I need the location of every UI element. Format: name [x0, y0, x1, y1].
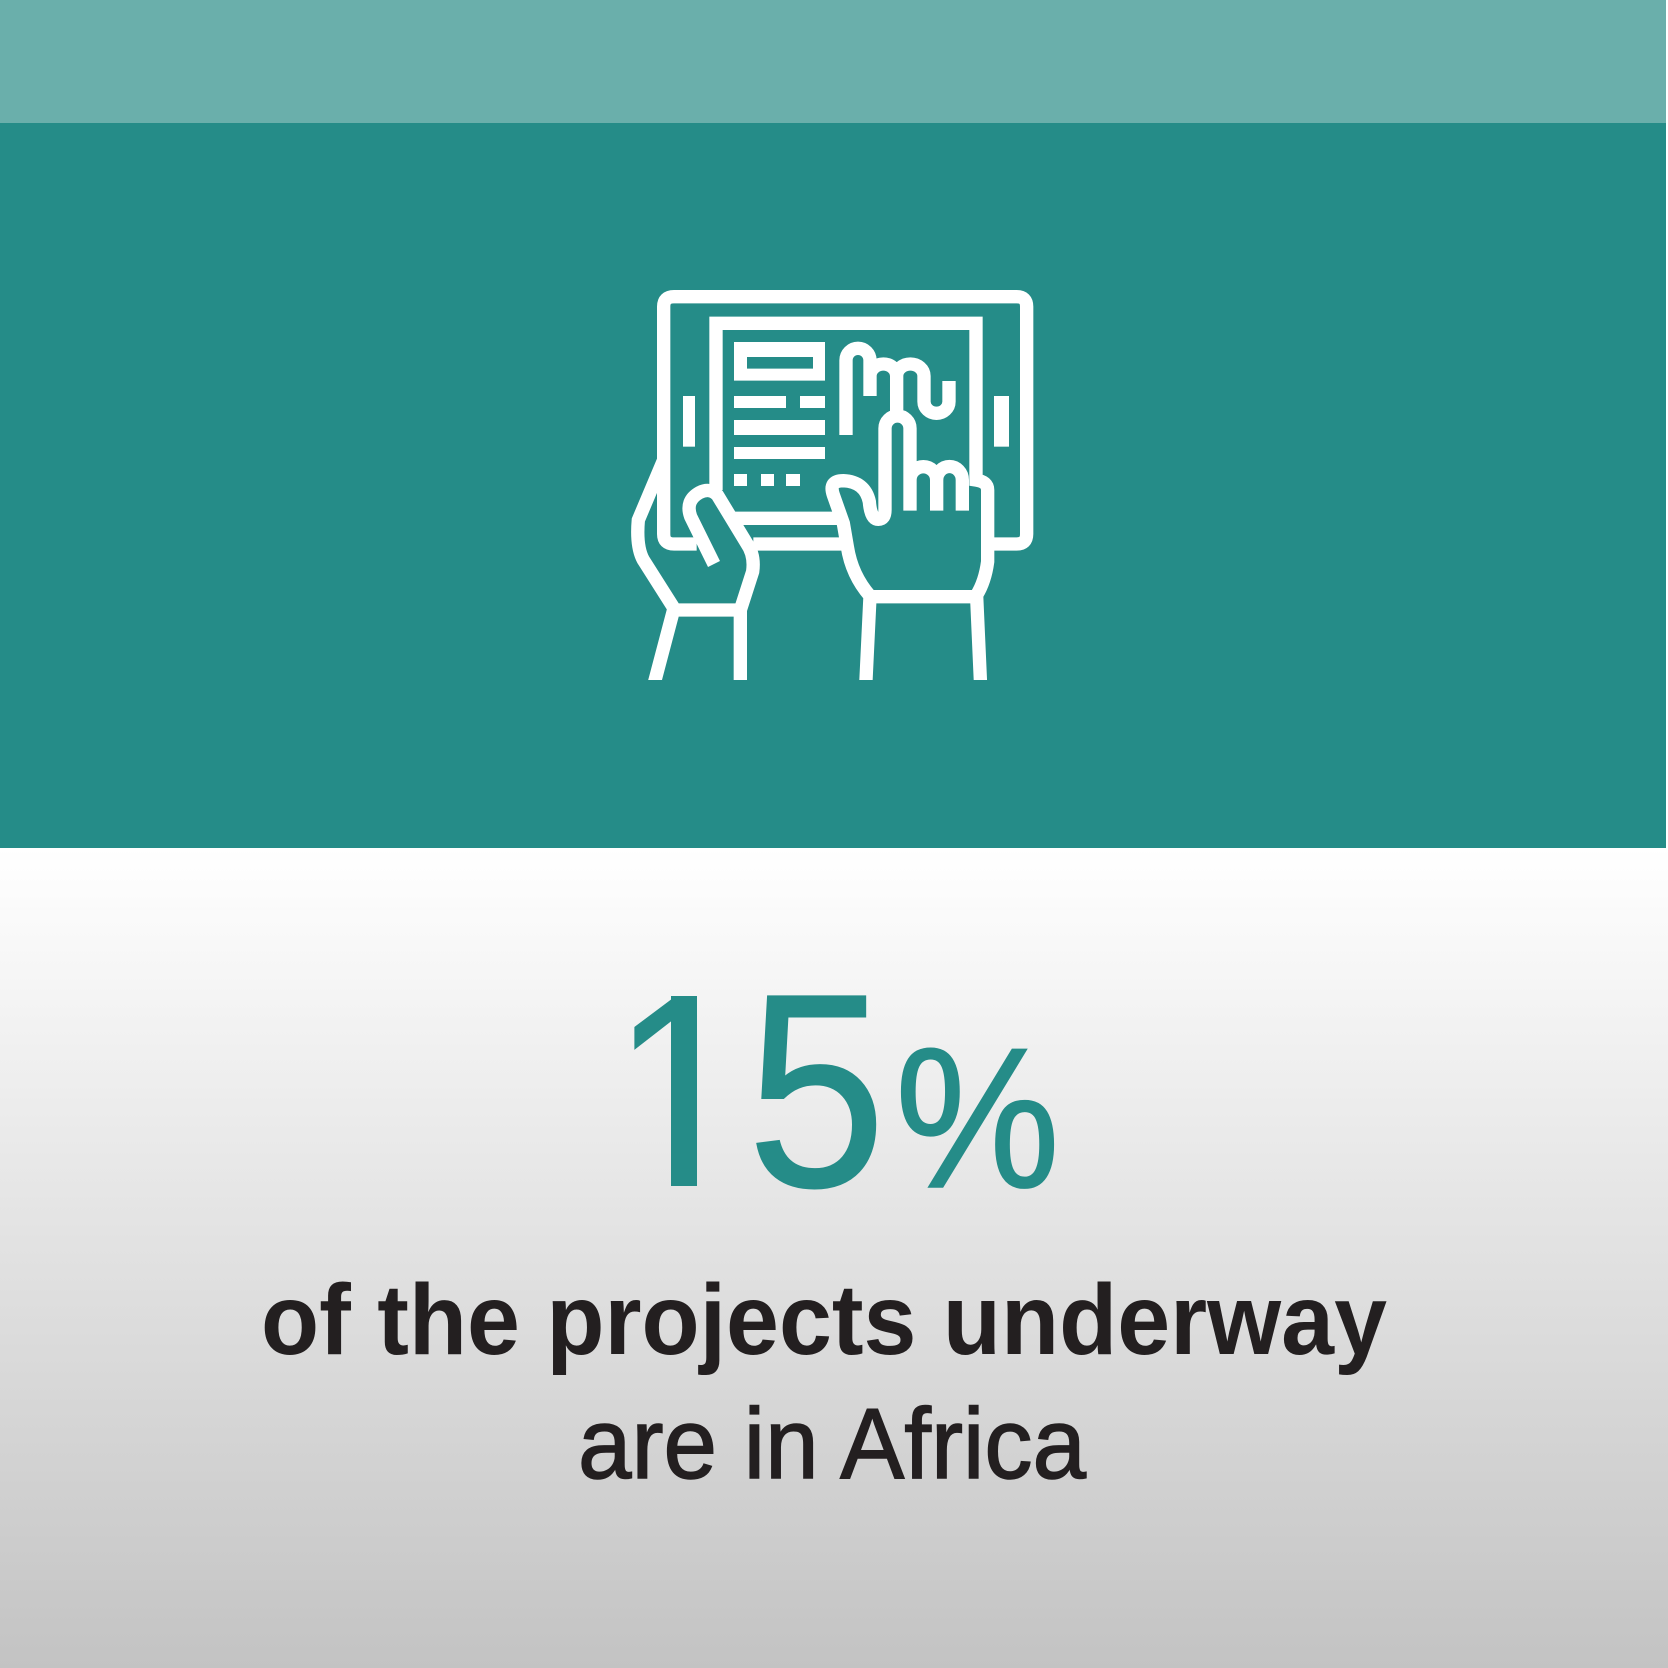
big number: 15 — [634, 995, 876, 1190]
percent sign: % — [895, 1007, 1060, 1230]
big number: 15: 1 — [610, 937, 751, 1245]
panel: lower gradient background — [0, 848, 1668, 1668]
text: regular line: are in Africa — [578, 1388, 1086, 1500]
text: bold line: of the projects underway — [261, 1264, 1387, 1376]
icon part: upper hand fingers — [846, 348, 949, 435]
icon part: tablet screen and pointing hand back — [716, 323, 988, 595]
icon part: side buttons — [683, 396, 1009, 447]
icon part: tablet body — [664, 297, 1027, 544]
icon part: holding hand — [638, 460, 753, 687]
icon: hands holding a tablet — [638, 297, 1027, 687]
icon part: document lines — [734, 342, 825, 486]
panel: teal icon panel — [0, 123, 1666, 848]
icon part: pointing hand — [832, 416, 981, 687]
panel: top light teal band — [0, 0, 1666, 123]
big number: 15: 5 — [747, 937, 886, 1245]
